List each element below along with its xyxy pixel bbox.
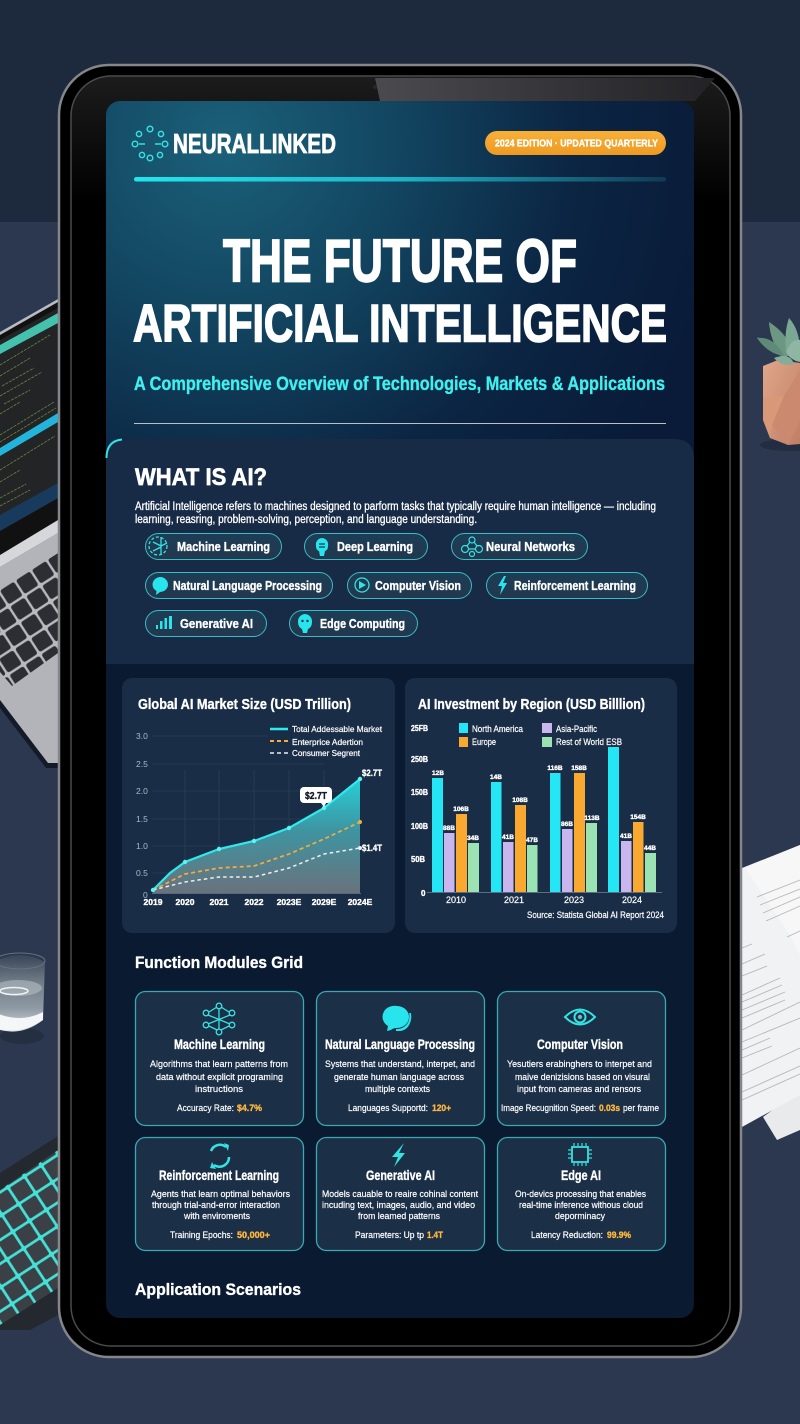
brand logo: NEURALLINKED (173, 128, 336, 159)
card: computer vision: per frame (623, 1103, 659, 1114)
icon: lightning bolt (392, 1143, 405, 1167)
bar value labels: 34B (467, 835, 479, 842)
bar value labels: 113B (584, 815, 600, 822)
card: reinforcement learning: Agents that learn optimal behaviors (151, 1189, 290, 1200)
chip: computer vision: Computer Vision (375, 578, 461, 593)
x axis labels: 2021 (504, 895, 524, 905)
heading: what is AI: WHAT IS AI? (135, 464, 267, 491)
card: generative AI: Generative AI (366, 1167, 435, 1183)
chip: deep learning: Deep Learning (337, 539, 413, 554)
card: generative AI: 1.4T (427, 1230, 443, 1241)
card: edge AI: deporminacy (555, 1211, 605, 1222)
chip: neural networks: Neural Networks (486, 539, 575, 554)
brand logo (132, 126, 336, 161)
x axis labels: 2024E (348, 897, 373, 907)
bar value labels: 86B (561, 821, 573, 828)
card: generative AI: Models cauable to reaire cohinal content (322, 1189, 478, 1200)
end value labels: $2.7T (362, 768, 382, 779)
end value labels: $1.4T (362, 843, 382, 854)
subtitle: A Comprehensive Overview of Technologies, Markets & Applications (134, 374, 665, 395)
bar value labels (432, 765, 656, 852)
y axis labels: 0.5 (136, 868, 148, 878)
x axis labels: 2010 (446, 895, 466, 905)
divider (134, 423, 666, 424)
card: computer vision: Computer Vision (537, 1036, 623, 1052)
card: reinforcement learning: through trial-and-error interaction (152, 1200, 280, 1211)
chip: natural language processing (146, 572, 332, 598)
definition text (135, 501, 656, 526)
bar value labels: 41B (620, 833, 632, 840)
title: THE FUTURE OF (223, 228, 577, 294)
x axis labels (144, 897, 373, 907)
chip: edge computing: Edge Computing (320, 616, 405, 631)
bar value labels: 108B (512, 797, 528, 804)
heading: function modules: Function Modules Grid (135, 953, 303, 972)
chart heading: AI Investment by Region (USD Billlion) (418, 697, 645, 713)
bar value labels: 88B (443, 825, 455, 832)
card: machine learning: Accuracy Rate: (177, 1103, 234, 1114)
chart heading: Global AI Market Size (USD Trillion) (138, 697, 351, 713)
x axis labels: 2019 (144, 897, 163, 907)
x axis labels: 2022 (245, 897, 264, 907)
definition text: learning, reasring, problem-solving, perception, and language understanding. (135, 514, 477, 526)
laptop on desk (0, 299, 58, 768)
teal backlit keyboard (0, 1136, 58, 1330)
x axis labels: 2024 (622, 895, 642, 905)
legend: Rest of World ESB (556, 737, 622, 747)
card: reinforcement learning: 50,000+ (237, 1230, 270, 1241)
y axis labels: 2.5 (136, 759, 148, 769)
x axis labels: 2020 (176, 897, 195, 907)
card: reinforcement learning: Reinforcement Learning (159, 1167, 279, 1183)
y axis labels: 50B (411, 855, 425, 864)
card: reinforcement learning (136, 1138, 304, 1250)
end value labels (362, 768, 382, 854)
card: edge AI: real-time inference withous cloud (519, 1200, 643, 1211)
bars: 2023 (550, 773, 597, 892)
tablet screen (106, 101, 694, 1318)
card: computer vision: maive denizisions based on visural (515, 1072, 650, 1083)
card: computer vision: Yesutiers erabinghers to interpet and (507, 1059, 652, 1070)
card: machine learning: instructions (195, 1084, 243, 1095)
legend: Asia-Pacific (556, 724, 597, 734)
card: generative AI (316, 1138, 484, 1250)
bar value labels: 106B (453, 806, 469, 813)
panel: what is AI (106, 439, 694, 664)
chip: machine learning: Machine Learning (177, 539, 270, 554)
y axis labels: 1.0 (136, 841, 148, 851)
card: natural language processing: Systems that understand, interpet, and (325, 1059, 475, 1070)
icon: network (203, 1003, 235, 1035)
definition text: Artificial Intelligence refers to machines designed to parform tasks that typically require human intelligence — including (135, 501, 656, 513)
heading: application scenarios: Application Scenarios (135, 1280, 301, 1299)
chip: neural networks (452, 534, 588, 560)
bar value labels: 158B (571, 765, 587, 772)
legend: Europe (472, 737, 496, 747)
icon: refresh arrows (210, 1143, 229, 1169)
x axis labels: 2029E (312, 897, 337, 907)
y axis labels: 100B (411, 822, 428, 831)
chip: deep learning (304, 534, 428, 560)
chip: generative AI: Generative AI (180, 616, 253, 631)
chip: natural language processing: Natural Language Processing (173, 578, 322, 593)
card: generative AI: incuding text, images, audio, and video (322, 1200, 475, 1211)
y axis labels: 2.0 (136, 786, 148, 796)
x axis labels (446, 895, 642, 905)
panel: AI investment by region chart (405, 678, 677, 933)
header accent bar (134, 177, 666, 182)
chip: machine learning (146, 534, 282, 560)
edition badge (485, 131, 666, 155)
potted succulent (757, 318, 800, 451)
card: edge AI: 99.9% (607, 1230, 631, 1241)
x axis labels: 2023E (277, 897, 302, 907)
legend (459, 723, 622, 747)
edition badge: 2024 EDITION · UPDATED QUARTERLY (495, 138, 658, 150)
y axis labels: 250B (411, 755, 428, 764)
y axis labels: 25FB (411, 724, 428, 733)
title (133, 228, 667, 354)
card: computer vision: 0.03s (599, 1103, 620, 1114)
chart legend: Enterprice Adertion (292, 737, 363, 747)
bar value labels: 41B (502, 834, 514, 841)
chip: reinforcement learning: Reinforcement Learning (514, 578, 636, 593)
chart legend: Total Addessable Market (292, 724, 383, 734)
bars: 2021 (491, 782, 538, 892)
bar value labels: 47B (526, 837, 538, 844)
card: natural language processing (316, 992, 484, 1126)
y axis labels: 3.0 (136, 731, 148, 741)
bar value labels: 44B (644, 845, 656, 852)
card: generative AI: from leamed patterns (358, 1211, 440, 1222)
area and line series (151, 777, 362, 894)
card: reinforcement learning: Training Epochs: (170, 1230, 233, 1241)
bar value labels: 14B (490, 774, 502, 781)
y axis labels: 150B (411, 788, 428, 797)
panel: global AI market size chart (122, 678, 395, 933)
bar value labels: 116B (547, 765, 563, 772)
card: edge AI: On-devics processing that enables (515, 1189, 646, 1200)
y axis labels: 0 (143, 890, 148, 900)
x axis labels: 2023 (564, 895, 584, 905)
card: computer vision (498, 992, 666, 1126)
chart legend: Consumer Segrent (292, 748, 361, 758)
y axis labels: 0 (421, 889, 426, 898)
card: natural language processing: generate human language across (334, 1072, 464, 1083)
icon: processor chip (568, 1143, 592, 1166)
bars: 2024 (608, 747, 656, 892)
x axis labels: 2021 (210, 897, 229, 907)
icon: eye (565, 1010, 595, 1024)
chip: generative AI (146, 610, 266, 636)
card: computer vision: Image Recugnition Speed: (501, 1103, 596, 1114)
card: machine learning (136, 992, 304, 1126)
icon: neural ring logo (132, 126, 168, 161)
card: generative AI: Parameters: Up tp (355, 1230, 424, 1241)
tablet device frame (59, 65, 741, 1357)
chip: edge computing (290, 610, 418, 636)
icon: speech bubbles (383, 1006, 410, 1031)
card: natural language processing: Languages Supportd: (348, 1103, 428, 1114)
card: edge AI: Latency Reduction: (531, 1230, 603, 1241)
chart legend (270, 724, 383, 758)
y axis labels (411, 724, 428, 898)
card: edge AI (498, 1138, 666, 1250)
bars: 2010 (432, 778, 479, 892)
bar value labels: 12B (432, 770, 444, 777)
card: edge AI: Edge AI (561, 1167, 601, 1183)
card: computer vision: input from cameras and rensors (517, 1084, 641, 1095)
chip: reinforcement learning (486, 572, 648, 598)
legend: North America (472, 724, 523, 734)
callout: 2.7T marker (300, 787, 332, 807)
source note: Source: Statista Global AI Report 2024 (527, 910, 664, 920)
glass of water (0, 953, 45, 1044)
card: machine learning: Algorithms that learn patterns from (150, 1059, 288, 1070)
bar value labels: 154B (630, 814, 646, 821)
card: machine learning: Machine Learning (174, 1036, 265, 1052)
card: natural language processing: Natural Language Processing (325, 1036, 475, 1052)
y axis labels (136, 731, 148, 900)
y axis labels: 1.5 (136, 814, 148, 824)
chip: computer vision (348, 572, 472, 598)
callout: 2.7T marker: $2.7T (305, 790, 327, 802)
card: machine learning: data without explicit programing (156, 1072, 283, 1083)
card: natural language processing: 120+ (432, 1103, 451, 1114)
papers (742, 845, 800, 1140)
card: natural language processing: multiple contexts (365, 1084, 430, 1095)
card: machine learning: $4.7% (237, 1103, 263, 1114)
card: reinforcement learning: with enviroments (183, 1211, 250, 1222)
